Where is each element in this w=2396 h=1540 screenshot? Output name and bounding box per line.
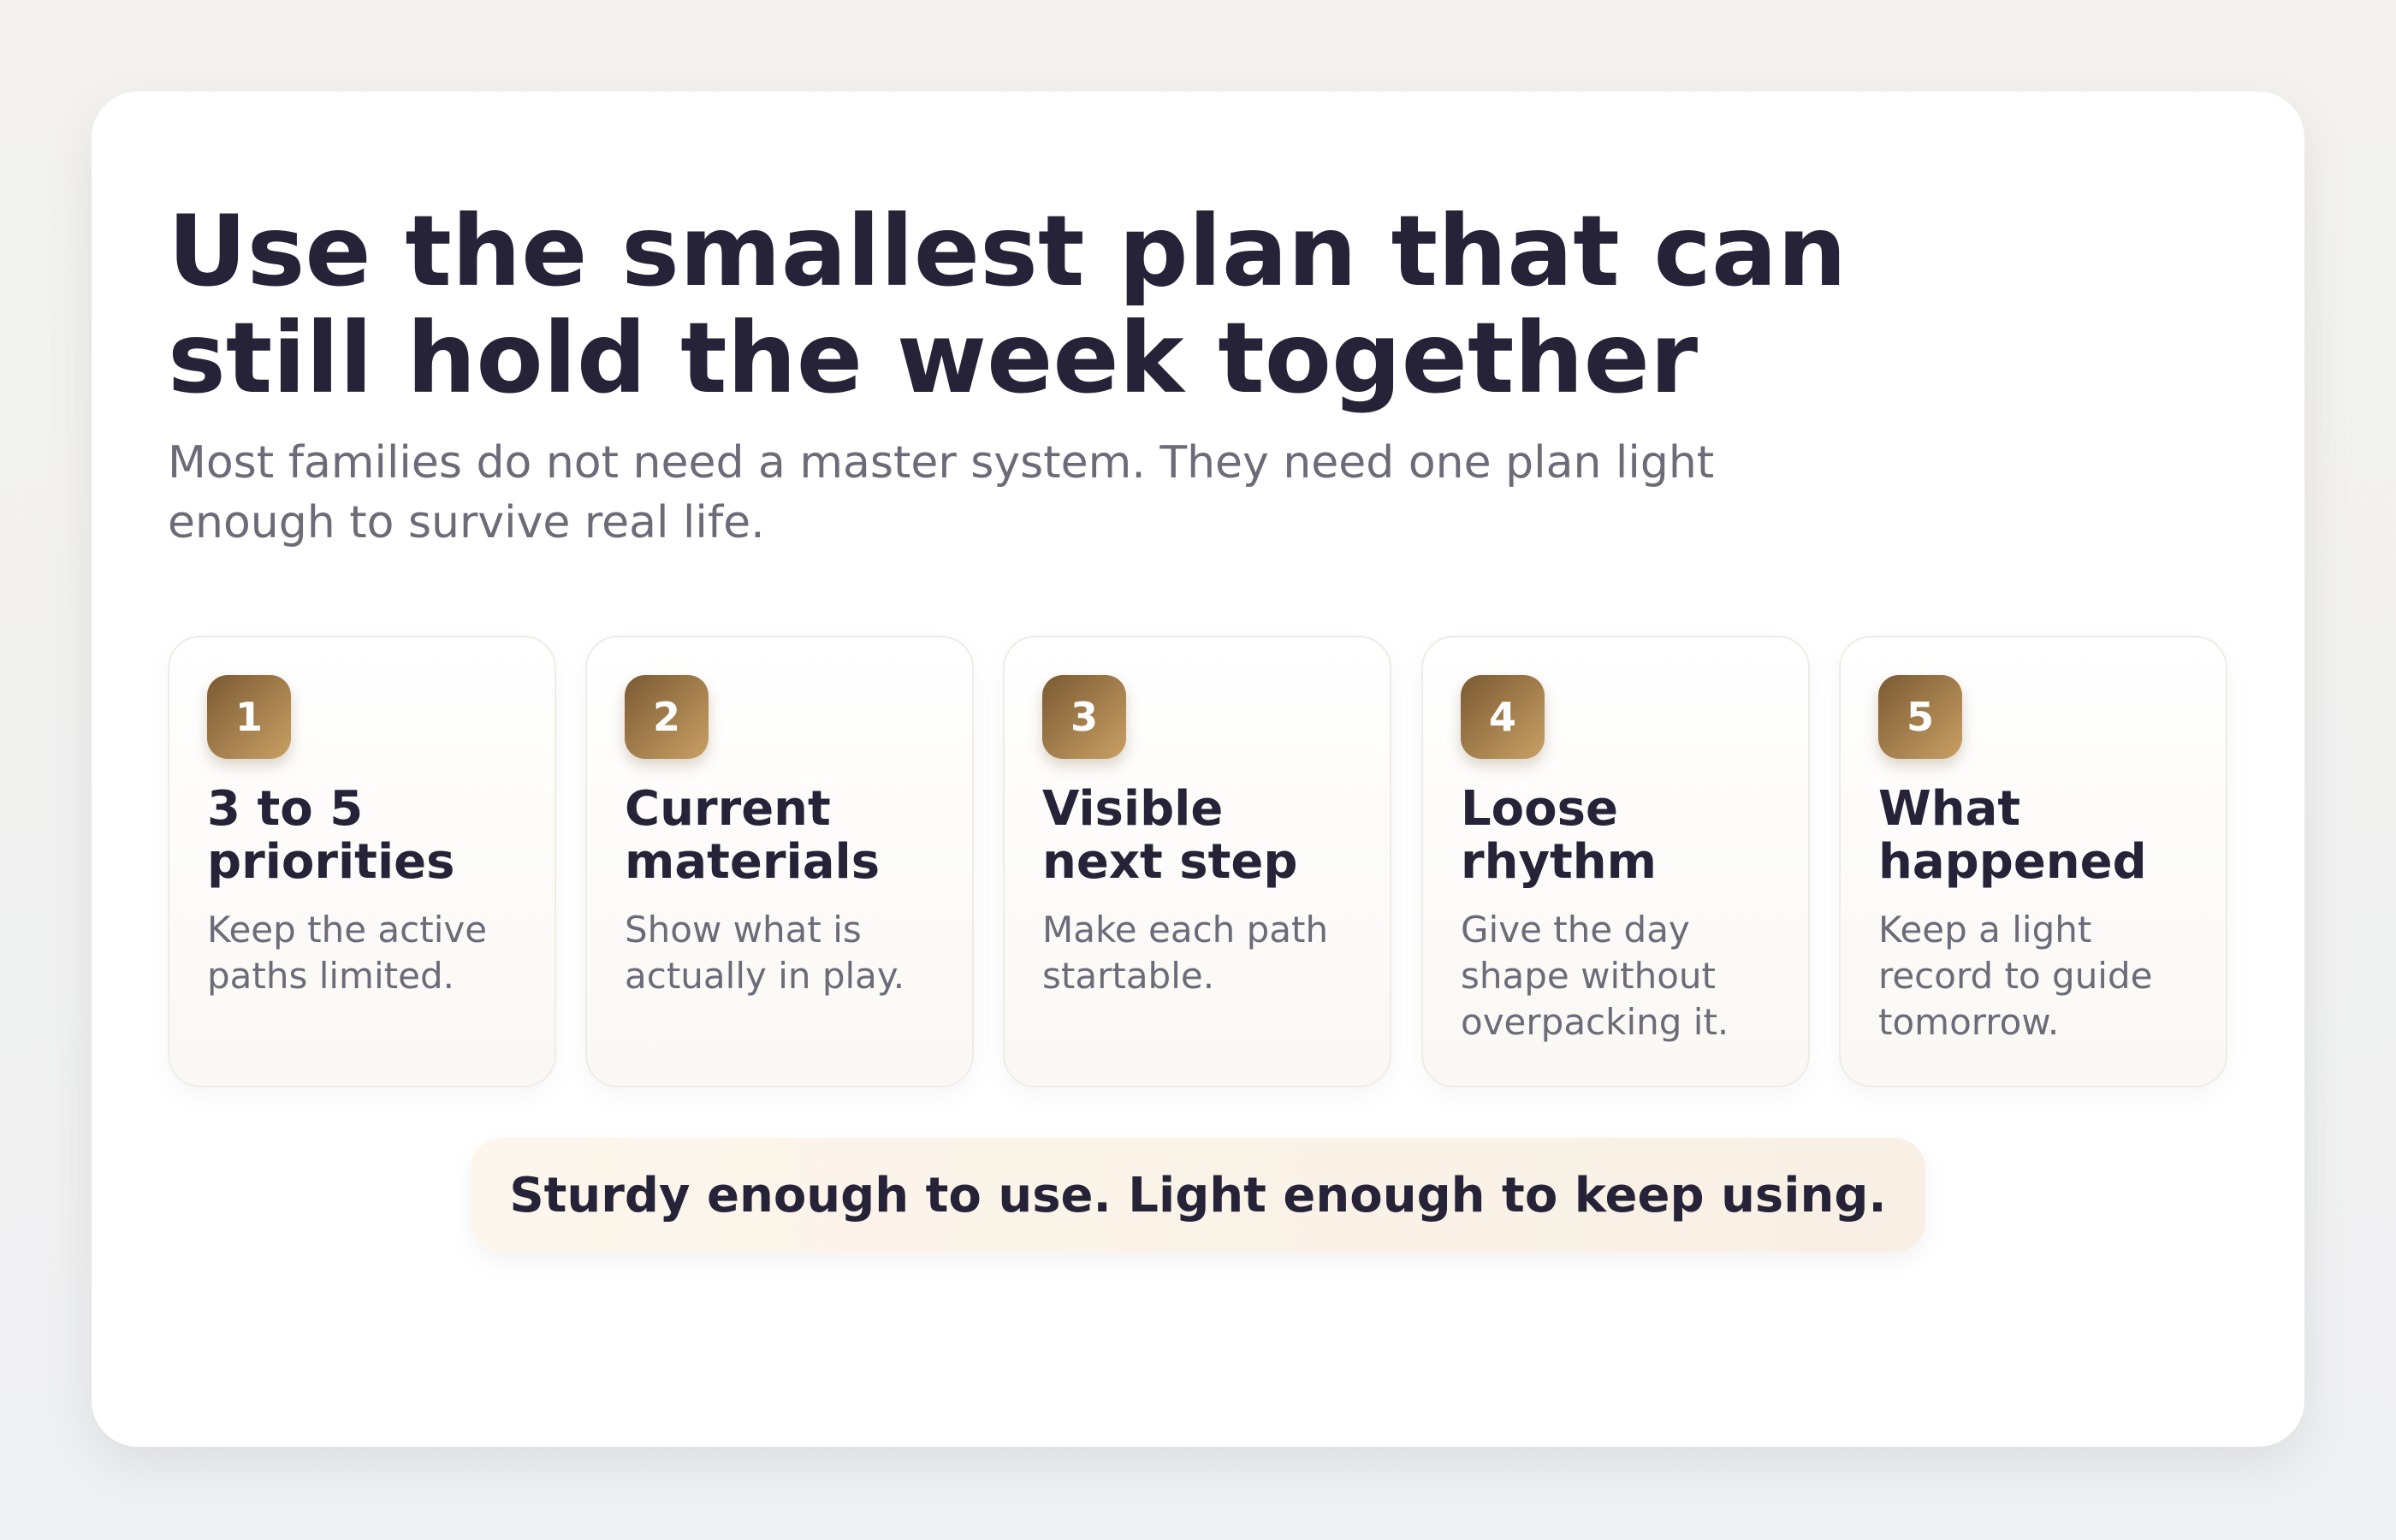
step 1: 1	[235, 694, 263, 740]
step 5: happened	[1878, 834, 2147, 890]
step 1: Keep the active paths limited.	[207, 909, 487, 997]
step 2: 2	[653, 694, 680, 740]
subtitle: Most families do not need a master system. They need one plan light enough to survive real life.	[168, 437, 1714, 548]
title: still hold the week together	[168, 301, 1698, 415]
step 4: 4	[1489, 694, 1516, 740]
step 2: Current	[625, 781, 831, 837]
step 5: What	[1878, 781, 2020, 837]
step 4: Give the day shape without overpacking it.	[1461, 909, 1729, 1043]
step 4: Loose	[1461, 781, 1618, 837]
title	[168, 194, 1847, 415]
step 2: materials	[625, 834, 880, 890]
step 1: 3 to 5	[207, 781, 363, 837]
step 3: Visible	[1042, 781, 1223, 837]
step 4	[1421, 636, 1810, 1087]
step 3: Make each path startable.	[1042, 909, 1328, 997]
step 3	[1003, 636, 1391, 1087]
step 2	[585, 636, 974, 1087]
step 5: Keep a light record to guide tomorrow.	[1878, 909, 2152, 1043]
step 4: rhythm	[1461, 834, 1657, 890]
banner callout	[471, 1138, 1925, 1253]
step 5: 5	[1907, 694, 1934, 740]
step 5	[1839, 636, 2227, 1087]
banner callout: Sturdy enough to use. Light enough to keep using.	[509, 1167, 1887, 1223]
step 1: priorities	[207, 834, 454, 890]
step 3: next step	[1042, 834, 1297, 890]
step 3: 3	[1070, 694, 1098, 740]
title: Use the smallest plan that can	[168, 194, 1847, 308]
step 2: Show what is actually in play.	[625, 909, 904, 997]
step 1	[168, 636, 556, 1087]
